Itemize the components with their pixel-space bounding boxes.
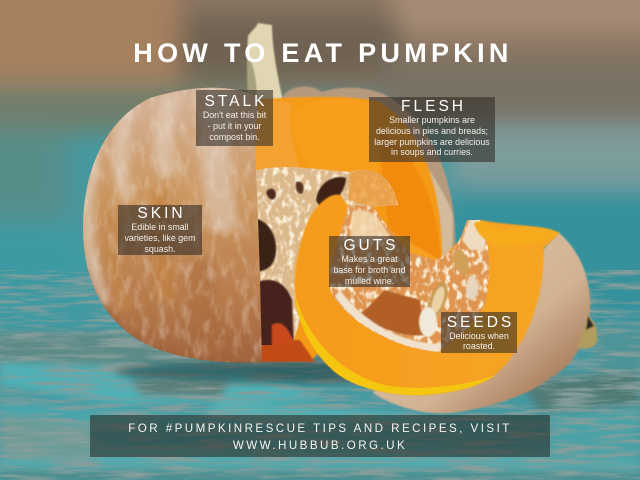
label: guts: GUTS [343, 237, 399, 254]
label: skin: Edible in small [131, 222, 189, 232]
label: flesh: delicious in pies and breads; [376, 126, 488, 136]
label: skin: varieties, like gem [124, 233, 196, 243]
footer call to action: WWW.HUBBUB.ORG.UK [233, 439, 407, 452]
label: flesh: FLESH [401, 98, 466, 115]
slice guts [330, 205, 490, 352]
seeds [419, 247, 478, 337]
footer call to action [90, 415, 550, 457]
label: stalk: Don't eat this bit [203, 110, 266, 120]
label: guts: Makes a great [341, 254, 398, 264]
pumpkin guts cavity [256, 167, 398, 345]
label: stalk: STALK [205, 93, 267, 110]
label: skin: SKIN [137, 205, 186, 222]
label: stalk [196, 90, 273, 146]
label: guts: base for broth and [333, 265, 406, 275]
spoon behind slice [577, 316, 597, 348]
footer call to action: FOR #PUMPKINRESCUE TIPS AND RECIPES, VISIT [128, 422, 512, 435]
pumpkin left half skin [80, 84, 265, 375]
label: skin [118, 205, 202, 255]
label: flesh: Smaller pumpkins are [389, 115, 475, 125]
slice flesh [294, 195, 559, 395]
pumpkin slice [294, 195, 590, 413]
slice rind [372, 232, 590, 413]
label: seeds: Delicious when [449, 330, 509, 340]
label: flesh [369, 97, 495, 162]
label: stalk: compost bin. [209, 132, 260, 142]
label: seeds [441, 312, 517, 353]
pumpkin back rim [283, 87, 455, 260]
title: HOW TO EAT PUMPKIN [133, 38, 513, 68]
label: skin: squash. [144, 244, 176, 254]
label: stalk: - put it in your [208, 121, 261, 131]
label: seeds: roasted. [463, 341, 495, 351]
label: guts: mulled wine. [345, 276, 394, 286]
slice top jagged edge [474, 221, 559, 246]
label: flesh: in soups and curries. [391, 147, 473, 157]
label: seeds: SEEDS [447, 314, 514, 330]
pumpkin stem [247, 23, 283, 100]
table shadow [115, 361, 485, 383]
label: guts [329, 236, 410, 287]
pumpkin flesh interior [250, 97, 442, 362]
label: flesh: larger pumpkins are delicious [374, 137, 490, 147]
